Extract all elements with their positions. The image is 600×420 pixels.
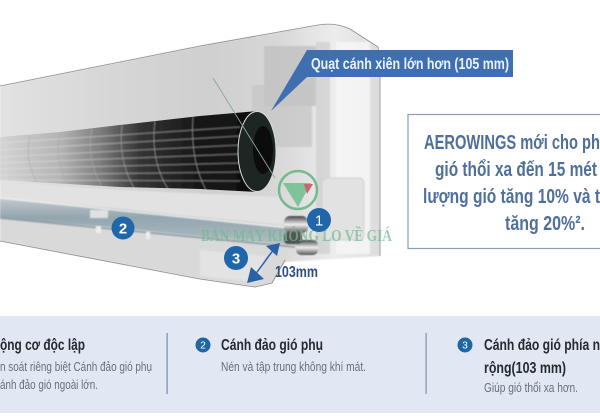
feature 2: Nén và tập trung không khí mát. [221,360,366,374]
bottom feature panel [0,316,600,413]
marker 3: 3 [232,250,240,268]
feature 3: rộng(103 mm) [484,360,566,377]
feature 2 [196,337,366,374]
fan end cap [238,112,276,192]
motor cylinders [284,216,318,255]
unit casing [0,24,380,287]
unit outline [0,24,380,287]
feature 3 [458,337,600,395]
text box: AEROWINGS [408,114,600,248]
marker 3 [224,246,248,270]
air conditioner unit illustration [0,24,380,287]
marker 2 [112,216,134,240]
feature 3: Giúp gió thổi xa hơn. [484,381,578,395]
marker 1: 1 [315,212,323,230]
arrow: 103mm dimension [247,243,280,283]
marker 2: 2 [119,220,127,238]
watermark [201,171,393,245]
front panel and flaps [0,198,300,282]
feature 2: 2 [200,340,206,352]
marker 1 [307,208,331,232]
dimension label: 103mm [275,264,318,281]
callout: fan size [271,50,513,111]
watermark text: BÁN MÁY KHÔNG LO VỀ GIÁ [201,226,393,245]
feature 1: ộng cơ độc lập [0,337,85,354]
feature 1 [0,337,152,392]
feature 2: Cánh đảo gió phụ [221,337,323,354]
watermark logo [279,171,317,209]
feature 3: 3 [462,340,468,352]
feature 1: n soát riêng biệt Cánh đảo gió phụ [0,360,152,374]
feature 1: ánh đảo gió ngoài lớn. [0,378,98,392]
callout: fan size: Quạt cánh xiên lớn hơn (105 mm) [311,56,509,73]
cross-flow fan [0,78,276,195]
